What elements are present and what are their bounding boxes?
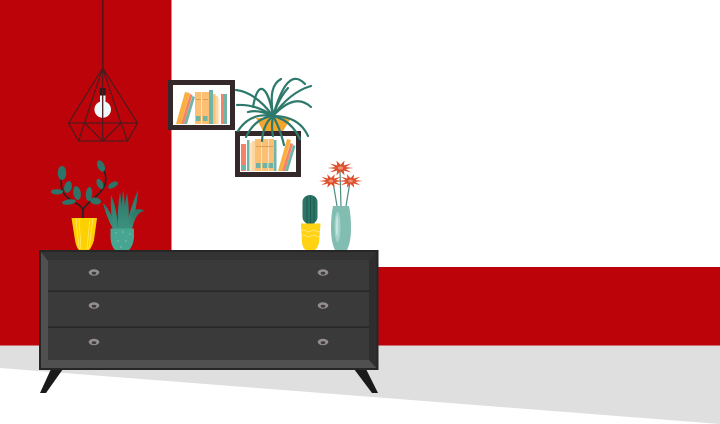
lamp cord	[102, 0, 104, 68]
teal pot succulent	[103, 190, 145, 250]
drawer handles	[89, 269, 328, 345]
handle mid right	[318, 302, 328, 309]
flower top	[327, 160, 354, 176]
lamp cage	[68, 68, 138, 141]
dresser legs	[40, 369, 378, 393]
handle top left	[89, 269, 99, 276]
cactus	[302, 195, 318, 224]
orange pot	[256, 118, 291, 131]
red wall band right	[171, 267, 720, 346]
bottom bevel	[41, 360, 376, 368]
flowers	[319, 160, 363, 188]
handle bottom right	[318, 339, 328, 345]
leaves	[51, 159, 119, 206]
handle mid left	[89, 302, 99, 309]
pot dots	[115, 231, 131, 248]
cactus in yellow pot	[301, 195, 320, 250]
yellow pot	[301, 224, 320, 250]
red wall block left	[0, 0, 172, 346]
shelf frame	[170, 82, 232, 128]
vase with flowers	[319, 160, 363, 250]
vase	[331, 206, 351, 250]
yellow pot	[72, 218, 97, 250]
dresser frame bevel	[41, 252, 376, 368]
left bevel	[41, 252, 48, 368]
flower left	[319, 174, 343, 188]
books	[241, 139, 296, 171]
wall shelf upper	[170, 82, 232, 128]
pendant lamp	[68, 0, 138, 141]
teal pot	[110, 228, 134, 250]
dresser body	[39, 250, 378, 370]
spider plant leaves	[236, 79, 311, 145]
lamp bulb	[94, 88, 111, 118]
drawer dividers	[48, 290, 369, 328]
flower right	[338, 174, 363, 188]
branches	[61, 167, 106, 219]
wall shelf lower	[238, 134, 298, 174]
books	[176, 90, 227, 124]
shelf frame	[238, 134, 298, 174]
cactus ribs	[307, 196, 314, 224]
vase highlight	[334, 212, 340, 242]
right bevel	[369, 252, 376, 368]
yellow pot plant	[51, 159, 119, 250]
pot stripes	[76, 218, 93, 249]
drawer front	[48, 260, 369, 360]
spider plant on shelf	[236, 79, 311, 145]
flower stems	[333, 170, 350, 207]
handle bottom left	[89, 339, 99, 345]
succulent leaves	[103, 190, 145, 229]
dresser	[39, 250, 378, 393]
grey floor	[0, 346, 720, 424]
handle top right	[318, 269, 328, 276]
pot wave pattern	[301, 230, 320, 237]
